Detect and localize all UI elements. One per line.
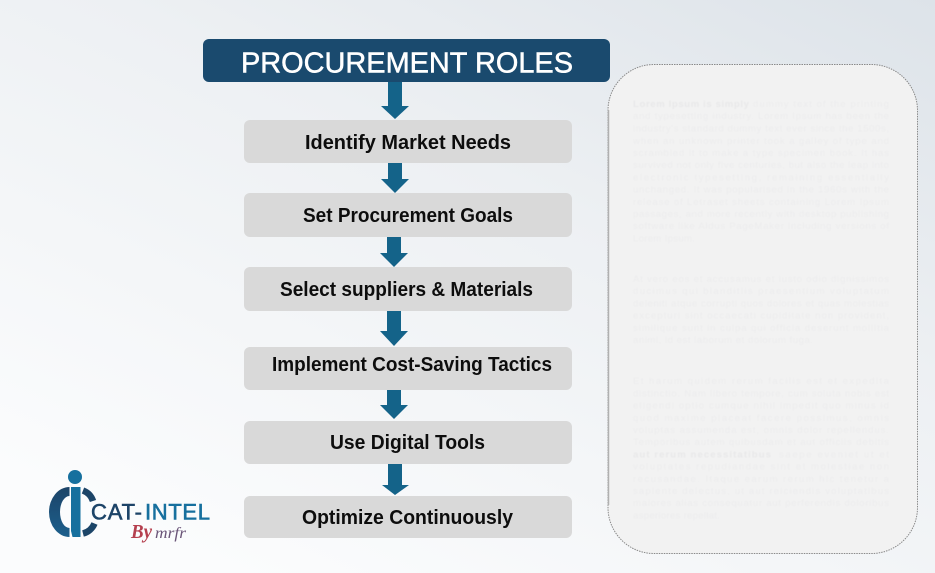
paragraph 3: saepe eveniet ut et — [779, 450, 889, 460]
paragraph 1 — [632, 99, 889, 244]
paragraph 1: dummy text of the printing — [753, 99, 889, 110]
logo wordmark: CAT-: CAT- — [91, 500, 142, 524]
paragraph 3: voluptas assumenda est, omnis dolor repellendus. — [633, 425, 889, 436]
paragraph 2: animi, id est laborum et dolorum fuga. — [633, 335, 813, 346]
arrow: title to step 1 — [381, 82, 409, 119]
paragraph 3: voluptates repudiandae sint et molestiae non — [633, 462, 889, 472]
icon: logo dot — [68, 470, 82, 484]
paragraph 1: unchanged. It was popularised in the 1960s with the — [633, 184, 889, 196]
arrow: step 5 to step 6 — [382, 464, 409, 495]
paragraph 3: asperiores repellat. — [633, 510, 720, 522]
paragraph 2 — [633, 274, 890, 346]
step 5: Use Digital Tools — [244, 421, 572, 464]
step 1: Identify Market Needs — [244, 120, 572, 163]
paragraph 3: maiores alias consequatur aut perferendis doloribus — [633, 498, 889, 509]
icon: logo right arcs — [83, 490, 94, 534]
arrow: step 4 to step 5 — [380, 390, 408, 419]
step 2: Set Procurement Goals — [244, 193, 572, 237]
paragraph 1: when an unknown printer took a galley of type and — [632, 136, 889, 147]
icon: logo left arc — [49, 487, 70, 537]
arrow: step 1 to step 2 — [381, 163, 409, 193]
paragraph 3: distinctio. Nam libero tempore, cum soluta nobis est — [633, 388, 889, 400]
step 3: Select suppliers & Materials — [244, 267, 572, 311]
paragraph 1: industry's standard dummy text ever since the 1500s, — [633, 124, 889, 134]
paragraph 1: passages, and more recently with desktop publishing — [633, 209, 889, 220]
logo tagline: mrfr: mrfr — [155, 525, 187, 542]
paragraph 1: release of Letraset sheets containing Lorem Ipsum — [633, 197, 889, 208]
step 4: Implement Cost-Saving Tactics — [244, 347, 572, 390]
paragraph 3 — [633, 376, 890, 522]
paragraph 1: Lorem Ipsum is simply — [633, 99, 750, 110]
paragraph 3: eligendi optio cumque nihil impedit quo minus id — [633, 400, 889, 412]
step 6: Optimize Continuously — [244, 496, 572, 538]
paragraph 1: scrambled it to make a type specimen book. It has — [633, 148, 889, 159]
paragraph 2: deleniti atque corrupti quos dolores et quas molestias — [633, 298, 889, 310]
paragraph 3: recusandae. Itaque earum rerum hic tenetur a — [633, 474, 890, 485]
arrow: step 3 to step 4 — [380, 311, 408, 346]
paragraph 1: Lorem Ipsum. — [633, 234, 695, 244]
paragraph 3: quod maxime placeat facere possimus, omnis — [633, 413, 889, 424]
logo tagline: By: By — [130, 521, 152, 543]
logo: CAT-INTEL by mrfr — [49, 470, 210, 543]
paragraph 3: sapiente delectus, ut aut reiciendis voluptatibus — [633, 486, 889, 497]
title banner — [203, 39, 610, 82]
step 3: Select suppliers & Materials: Select suppliers & Materials — [280, 278, 533, 301]
paragraph 1: and typesetting industry. Lorem Ipsum has been the — [633, 111, 889, 122]
step 2: Set Procurement Goals: Set Procurement Goals — [303, 204, 513, 227]
paragraph 1: electronic typesetting, remaining essentially — [633, 172, 889, 184]
logo wordmark: INTEL: INTEL — [145, 500, 210, 524]
paragraph 3: Temporibus autem quibusdam et aut officiis debitis — [633, 437, 889, 448]
paragraph 3: aut rerum necessitatibus — [633, 450, 771, 460]
paragraph 3: Et harum quidem rerum facilis est et expedita — [633, 376, 890, 387]
paragraph 2: similique sunt in culpa qui officia deserunt mollitia — [633, 323, 890, 334]
step 6: Optimize Continuously: Optimize Continuously — [302, 506, 514, 529]
step 1: Identify Market Needs: Identify Market Needs — [305, 131, 511, 154]
paragraph 2: ducimus qui blanditiis praesentium voluptatum — [633, 286, 889, 297]
paragraph 1: survived not only five centuries, but also the leap into — [633, 160, 889, 171]
step 5: Use Digital Tools: Use Digital Tools — [330, 431, 485, 454]
panel: faded placeholder text — [608, 64, 918, 554]
title banner: PROCUREMENT ROLES — [241, 48, 573, 80]
paragraph 2: excepturi sint occaecati cupiditate non provident, — [633, 310, 889, 322]
step 4: Implement Cost-Saving Tactics: Implement Cost-Saving Tactics — [272, 353, 552, 376]
paragraph 2: At vero eos et accusamus et iusto odio dignissimos — [633, 274, 889, 285]
paragraph 1: software like Aldus PageMaker including versions of — [633, 221, 889, 232]
arrow: step 2 to step 3 — [380, 237, 408, 267]
icon: logo stem — [71, 487, 80, 537]
